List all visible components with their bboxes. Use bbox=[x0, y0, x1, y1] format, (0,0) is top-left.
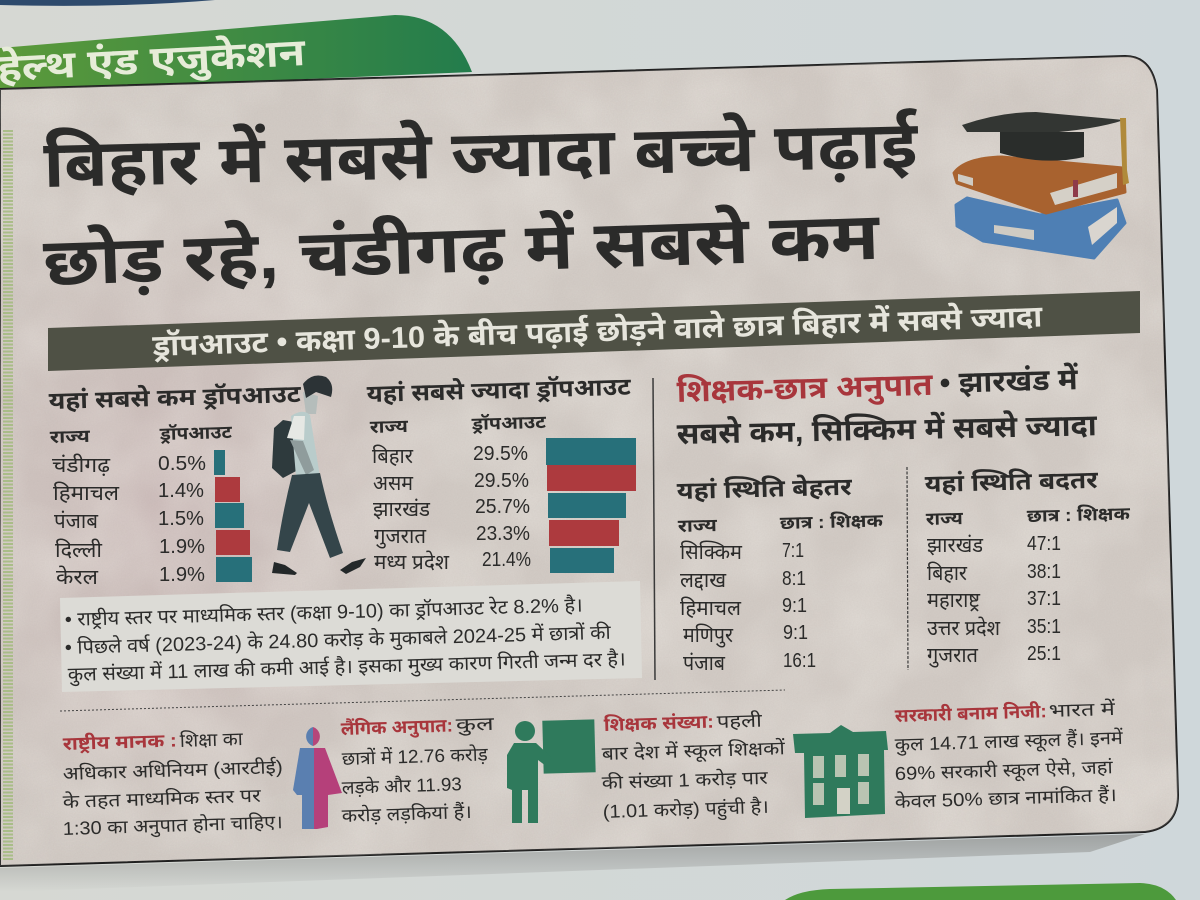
text block: gender ratio: कुल bbox=[455, 713, 495, 737]
bars bbox=[546, 438, 636, 573]
legs bbox=[277, 473, 343, 558]
rows: 7:1 bbox=[782, 539, 804, 562]
section heading: teacher-student ratio: सबसे कम, सिक्किम में सबसे ज्यादा bbox=[676, 407, 1098, 451]
text block: teacher count bbox=[601, 710, 786, 824]
text block: national norm: के तहत माध्यमिक स्तर पर bbox=[62, 784, 262, 812]
rows: 29.5% bbox=[473, 442, 528, 465]
panel: worse ratio table bbox=[924, 466, 1131, 668]
icon: teacher at board bbox=[507, 719, 596, 823]
rows: गुजरात bbox=[927, 644, 978, 668]
text block: government vs private: कुल 14.71 लाख स्कूल हैं। इनमें bbox=[894, 727, 1124, 757]
rows: झारखंड bbox=[373, 498, 431, 521]
section heading: teacher-student ratio: शिक्षक-छात्र अनुपात bbox=[676, 367, 934, 411]
column headers: राज्य bbox=[50, 426, 91, 447]
panel: lowest dropout table bbox=[48, 380, 302, 589]
text block: national norm: शिक्षा का bbox=[179, 728, 244, 751]
rows: लद्दाख bbox=[680, 569, 727, 592]
backpack bbox=[272, 420, 298, 478]
column headers: राज्य bbox=[926, 508, 964, 529]
rows bbox=[927, 532, 1061, 668]
rows: 9:1 bbox=[783, 621, 808, 644]
rows: 1.5% bbox=[158, 507, 204, 530]
rows: 25.7% bbox=[475, 495, 530, 518]
blue book bbox=[956, 198, 1125, 258]
rows: 47:1 bbox=[1027, 532, 1061, 555]
text block: teacher count: की संख्या 1 करोड़ पार bbox=[601, 767, 769, 793]
column headers bbox=[678, 510, 884, 536]
section heading: teacher-student ratio bbox=[676, 362, 1098, 451]
headline: छोड़ रहे, चंडीगढ़ में सबसे कम bbox=[42, 199, 881, 299]
text block: teacher count: बार देश में स्कूल शिक्षकों bbox=[601, 736, 786, 766]
text block: teacher count: शिक्षक संख्या: bbox=[603, 711, 714, 735]
cap bbox=[1000, 132, 1084, 161]
tassel bbox=[1120, 118, 1129, 185]
rows: झारखंड bbox=[927, 534, 984, 557]
brown book bbox=[954, 157, 1125, 213]
rows: 23.3% bbox=[476, 522, 530, 545]
left stripe bbox=[3, 130, 13, 860]
rows: गुजरात bbox=[374, 525, 426, 549]
shoes bbox=[272, 562, 297, 575]
text block: national norm: राष्ट्रीय मानक : bbox=[62, 729, 177, 755]
bars bbox=[214, 450, 252, 582]
column headers: छात्र : शिक्षक bbox=[1027, 503, 1131, 526]
text block: national norm: अधिकार अधिनियम (आरटीई) bbox=[62, 756, 283, 784]
arm bbox=[290, 440, 314, 475]
hair bbox=[303, 376, 332, 398]
rows: 1.4% bbox=[158, 479, 204, 502]
rows: महाराष्ट्र bbox=[927, 589, 981, 612]
text block: government vs private bbox=[894, 698, 1124, 812]
icon: walking student bbox=[272, 376, 366, 575]
torso bbox=[291, 412, 320, 477]
heading: यहां स्थिति बदतर bbox=[924, 466, 1099, 498]
rows: 29.5% bbox=[474, 469, 529, 492]
rows: 16:1 bbox=[783, 649, 816, 672]
rows: चंडीगढ़ bbox=[52, 453, 110, 477]
text block: gender ratio: करोड़ लड़कियां हैं। bbox=[341, 801, 472, 826]
text block: teacher count: (1.01 करोड़) पहुंची है। bbox=[602, 795, 769, 824]
tab title: हेल्थ एंड एजुकेशन bbox=[0, 30, 307, 92]
rows: सिक्किम bbox=[680, 540, 743, 564]
rows: 35:1 bbox=[1027, 615, 1061, 638]
rows: 9:1 bbox=[782, 594, 807, 617]
neck and face bbox=[303, 392, 318, 414]
rows: हिमाचल bbox=[53, 481, 120, 505]
text block: national norm bbox=[62, 728, 283, 841]
bottom shadow bbox=[0, 834, 1145, 892]
column headers: छात्र : शिक्षक bbox=[780, 510, 884, 533]
heading: यहां सबसे कम ड्रॉपआउट bbox=[48, 380, 302, 415]
panel: highest dropout table bbox=[366, 373, 636, 574]
rows: 1.9% bbox=[159, 535, 205, 558]
rows: पंजाब bbox=[683, 652, 725, 675]
rows: मध्य प्रदेश bbox=[374, 550, 450, 574]
rows: 0.5% bbox=[158, 452, 206, 475]
column headers: ड्रॉपआउट bbox=[158, 422, 232, 445]
icon: male female figure bbox=[293, 727, 342, 829]
rows: दिल्ली bbox=[55, 538, 103, 562]
rows: 8:1 bbox=[782, 567, 806, 590]
rows: 25:1 bbox=[1027, 642, 1061, 665]
rows: केरल bbox=[56, 565, 99, 589]
text block: government vs private: भारत में bbox=[1048, 698, 1116, 721]
rows: बिहार bbox=[927, 561, 968, 585]
text block: teacher count: पहली bbox=[716, 710, 764, 732]
rows: 38:1 bbox=[1027, 560, 1061, 583]
icon: graduation cap on books bbox=[954, 112, 1129, 258]
section banner: dropout bbox=[48, 291, 1140, 371]
section tab bbox=[0, 15, 472, 92]
rows bbox=[52, 452, 206, 589]
text block: gender ratio: छात्रों में 12.76 करोड़ bbox=[341, 743, 489, 769]
sleeve bbox=[287, 416, 305, 440]
rows: पंजाब bbox=[54, 510, 98, 533]
column headers: ड्रॉपआउट bbox=[470, 412, 546, 435]
rows: हिमाचल bbox=[680, 596, 742, 620]
column headers bbox=[50, 422, 232, 447]
section heading: teacher-student ratio: • झारखंड में bbox=[939, 362, 1079, 400]
text block: gender ratio bbox=[340, 713, 495, 826]
icon: school building bbox=[793, 725, 888, 818]
callout: national notes: • राष्ट्रीय स्तर पर माध्यमिक स्तर (कक्षा 9-10) का ड्रॉपआउट रेट 8.2% है। bbox=[64, 594, 583, 631]
rows: 37:1 bbox=[1027, 587, 1061, 610]
column headers: राज्य bbox=[370, 416, 409, 437]
text block: gender ratio: लैंगिक अनुपात: bbox=[340, 714, 453, 741]
rows: मणिपुर bbox=[683, 623, 734, 648]
rows: असम bbox=[373, 472, 414, 495]
rows bbox=[372, 442, 531, 574]
column headers bbox=[370, 412, 546, 437]
headline: बिहार में सबसे ज्यादा बच्चे पढ़ाई bbox=[43, 107, 920, 201]
callout: national notes: कुल संख्या में 11 लाख की कमी आई है। इसका मुख्य कारण गिरती जन्म दर है। bbox=[67, 647, 626, 687]
text block: government vs private: केवल 50% छात्र नामांकित हैं। bbox=[894, 783, 1117, 812]
panel: better ratio table bbox=[676, 473, 884, 675]
callout: national notes: • पिछले वर्ष (2023-24) के 24.80 करोड़ के मुकाबले 2024-25 में छात्रों की bbox=[64, 621, 612, 660]
heading: यहां स्थिति बेहतर bbox=[676, 473, 853, 505]
bottom right green tab bbox=[785, 883, 1176, 900]
heading: यहां सबसे ज्यादा ड्रॉपआउट bbox=[366, 373, 632, 408]
rows: बिहार bbox=[372, 444, 414, 468]
banner text: ड्रॉपआउट • कक्षा 9-10 के बीच पढ़ाई छोड़ने वाले छात्र बिहार में सबसे ज्यादा bbox=[151, 298, 1044, 364]
rows bbox=[680, 539, 816, 675]
text block: gender ratio: लड़के और 11.93 bbox=[341, 772, 462, 798]
text block: government vs private: सरकारी बनाम निजी: bbox=[894, 700, 1047, 726]
column headers: राज्य bbox=[678, 515, 718, 536]
rows: उत्तर प्रदेश bbox=[927, 616, 1001, 640]
headline bbox=[42, 107, 920, 299]
rows: 21.4% bbox=[482, 548, 531, 571]
top dark edge bbox=[0, 0, 215, 6]
rows: 1.9% bbox=[159, 563, 205, 586]
text block: government vs private: 69% सरकारी स्कूल ऐसे, जहां bbox=[894, 755, 1114, 786]
text block: national norm: 1:30 का अनुपात होना चाहिए। bbox=[62, 811, 283, 841]
callout: national notes bbox=[60, 581, 642, 692]
column headers bbox=[926, 503, 1131, 529]
